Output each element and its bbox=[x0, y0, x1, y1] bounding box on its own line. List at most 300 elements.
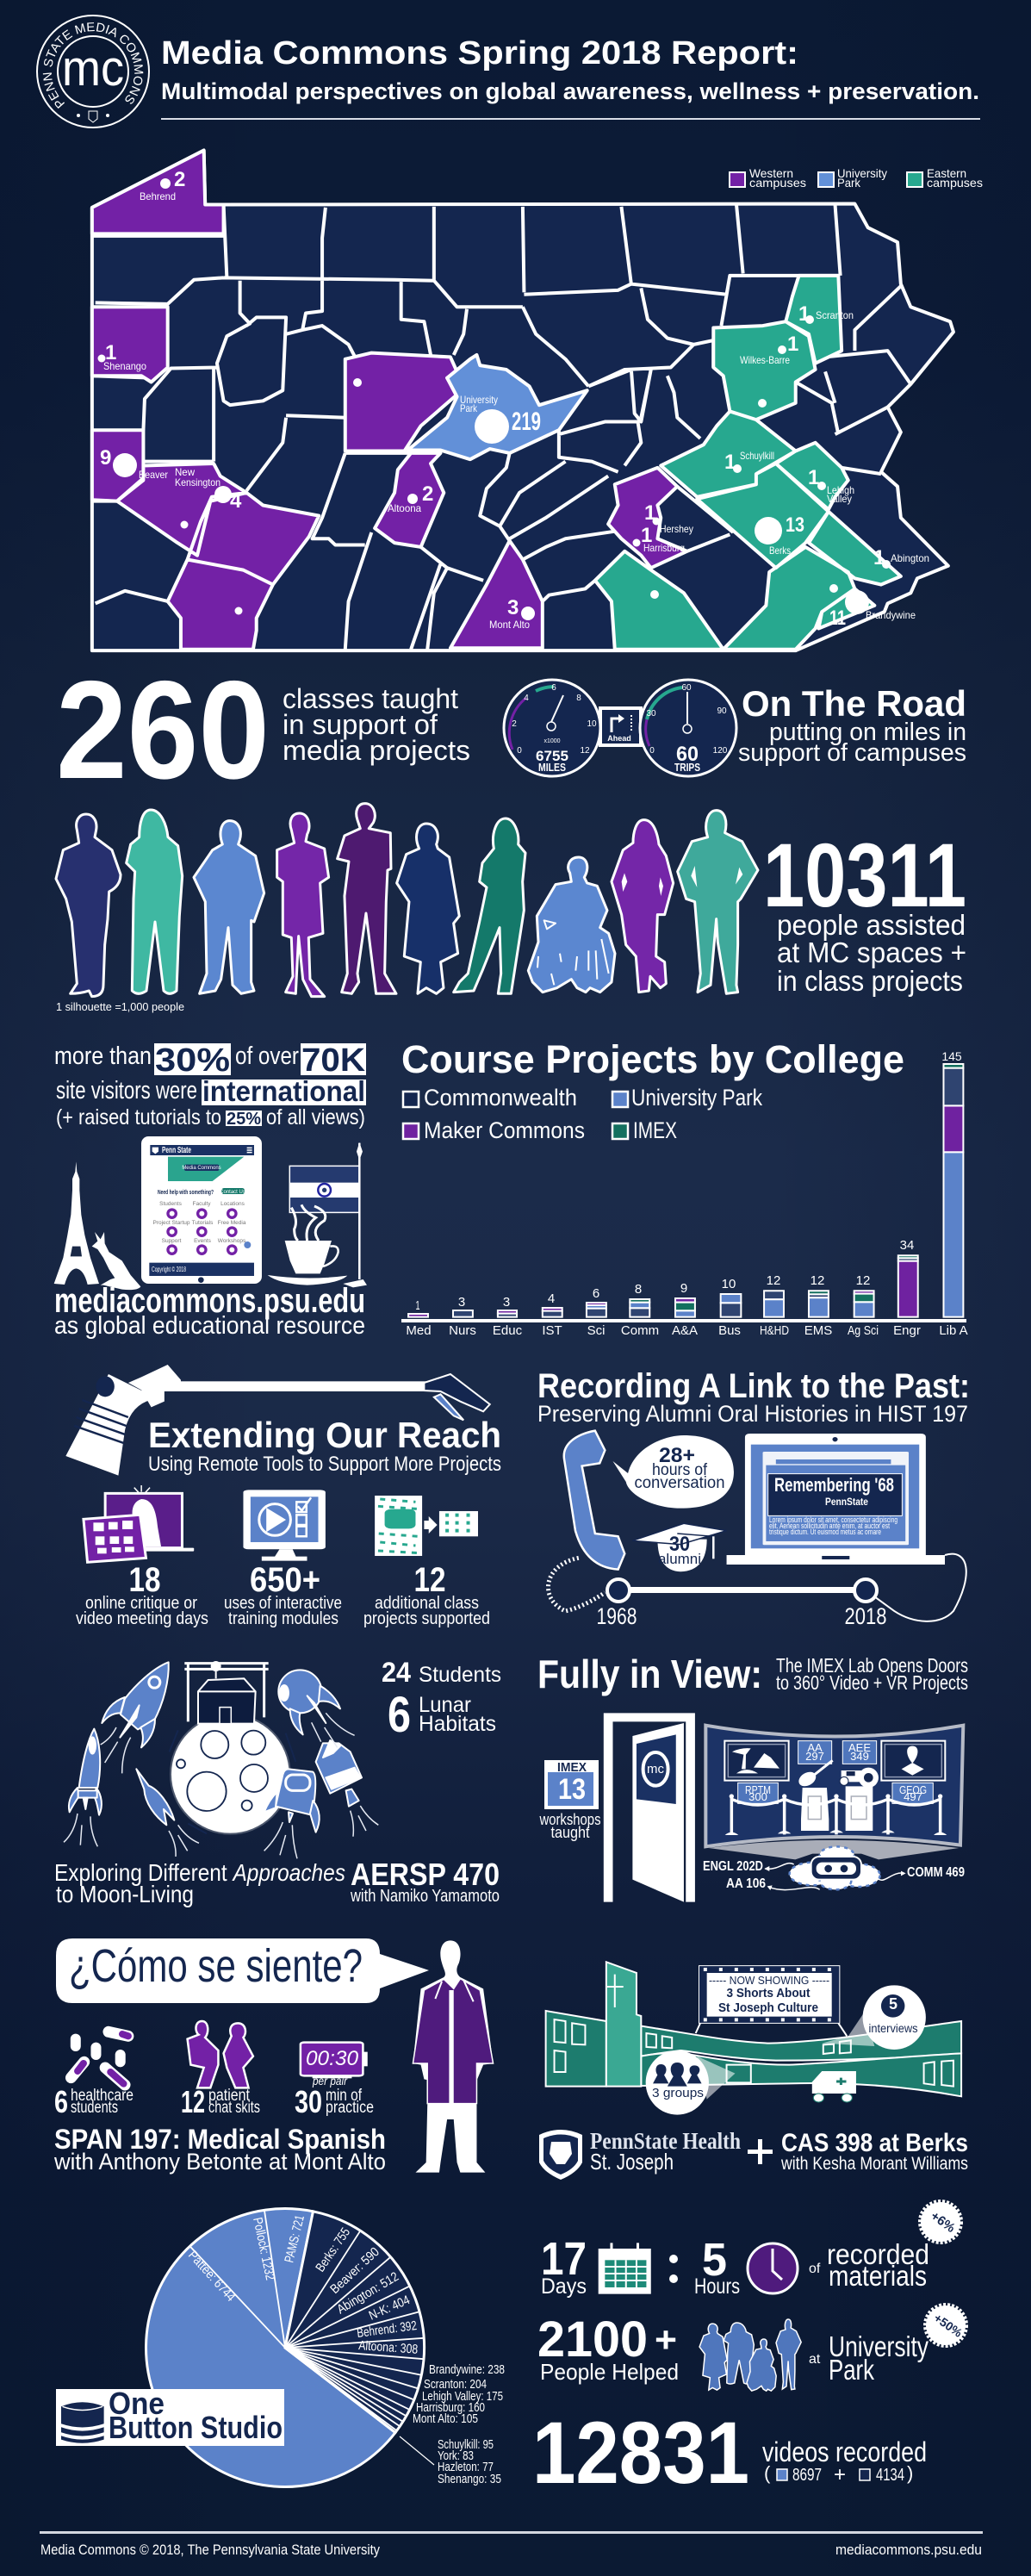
campus counts: 1 bbox=[873, 546, 885, 569]
doctor silhouette bbox=[413, 1940, 494, 2173]
bar categories: A&A bbox=[672, 1323, 698, 1338]
heading: Fully in View bbox=[537, 1652, 968, 1696]
stats: medical Spanish: 12 bbox=[181, 2084, 205, 2119]
logo: Penn State Media Commons seal: PENN STATE MEDIA COMMONS bbox=[43, 22, 143, 109]
campus counts: 13 bbox=[786, 513, 804, 537]
illustration: lunar habitat and rockets bbox=[64, 1661, 378, 1858]
heading: Extending Our Reach: Extending Our Reach bbox=[148, 1415, 501, 1455]
calendar: IMEX workshops: taught bbox=[551, 1824, 589, 1841]
gauge: trips: 60 bbox=[681, 683, 692, 693]
stat: people helped at University Park: 2100 bbox=[537, 2312, 648, 2368]
callout: interviews: 5 bbox=[889, 1995, 897, 2013]
laptop screen text: Remembering '68 bbox=[774, 1474, 894, 1496]
stat: students and habitats: Lunar bbox=[419, 1693, 471, 1717]
plate labels: GEOG bbox=[899, 1783, 927, 1796]
bar categories: EMS bbox=[804, 1323, 832, 1338]
laptop screen text: PennState bbox=[825, 1496, 868, 1508]
speech bubble bbox=[612, 1435, 734, 1509]
chart heading: Course Projects by College: Course Projects by College bbox=[401, 1037, 904, 1081]
callout bubble bbox=[822, 1985, 926, 2050]
stat: 260 classes: in support of bbox=[283, 709, 438, 740]
plate labels: AA bbox=[807, 1741, 823, 1754]
tablet labels: Support bbox=[162, 1238, 182, 1244]
plate labels: 497 bbox=[904, 1790, 922, 1803]
heading: On The Road: support of campuses bbox=[738, 739, 966, 767]
gauge: miles: 2 bbox=[512, 719, 517, 729]
badge: +50% bbox=[925, 2305, 966, 2346]
bar values: 12 bbox=[811, 1273, 824, 1288]
stat: days and hours of recorded materials: 5 bbox=[702, 2234, 727, 2286]
campus counts: 219 bbox=[512, 408, 541, 436]
icons: global landmarks and tablet bbox=[54, 1136, 367, 1290]
headset course labels: AA 106 bbox=[726, 1876, 766, 1891]
bar values: 3 bbox=[503, 1295, 510, 1310]
map legend bbox=[730, 166, 983, 190]
illustration: St Joseph hospital bbox=[546, 1962, 961, 2115]
slice labels outside pie: Lehigh Valley: 175 bbox=[422, 2389, 503, 2404]
stat: 260 classes: media projects bbox=[283, 735, 470, 766]
stats: remote tools: training modules bbox=[228, 1609, 338, 1628]
icon: telephone bbox=[548, 1431, 624, 1611]
tablet labels: Copyright © 2018 bbox=[152, 1266, 186, 1273]
chart legend: Maker Commons bbox=[424, 1117, 585, 1143]
stat: 260 classes: 260 bbox=[56, 652, 270, 808]
bar values: 1 bbox=[415, 1298, 420, 1313]
marquee text bbox=[709, 1974, 829, 2015]
timeline bbox=[596, 1579, 887, 1629]
stat: students and habitats bbox=[382, 1657, 501, 1743]
heading: On The Road: putting on miles in bbox=[769, 719, 966, 746]
stat: people helped at University Park: University bbox=[829, 2330, 929, 2362]
title bbox=[161, 35, 980, 120]
heading: Extending Our Reach: Using Remote Tools to Support More Projects bbox=[148, 1453, 501, 1476]
shield bbox=[539, 2130, 582, 2180]
screen panel bbox=[705, 1726, 963, 1859]
icon: cylinders bbox=[61, 2402, 104, 2443]
chart legend: University Park bbox=[631, 1085, 762, 1111]
stats: remote tools: video meeting days bbox=[76, 1609, 208, 1628]
stat: 260 classes bbox=[56, 652, 470, 808]
campus names: Behrend bbox=[140, 190, 176, 202]
heading: Fully in View: The IMEX Lab Opens Doors bbox=[776, 1654, 968, 1677]
campus names: Abington bbox=[891, 552, 929, 564]
chart baseline bbox=[401, 1319, 966, 1322]
badge: +50%: +50% bbox=[931, 2311, 966, 2340]
callout: groups: 3 groups bbox=[652, 2086, 704, 2100]
stats: medical Spanish: students bbox=[71, 2099, 118, 2117]
road sign bbox=[600, 708, 641, 745]
gauge: trips: 0 bbox=[649, 746, 655, 756]
marquee text: ----- NOW SHOWING ----- bbox=[709, 1974, 829, 1987]
bar values: 12 bbox=[767, 1273, 780, 1288]
bar values: 8 bbox=[635, 1282, 642, 1297]
campus names: Lehigh bbox=[827, 484, 854, 496]
bar categories: Nurs bbox=[449, 1323, 476, 1338]
headset course labels: ENGL 202D bbox=[703, 1859, 763, 1874]
laptop screen text bbox=[769, 1474, 897, 1536]
marquee text: 3 Shorts About bbox=[727, 1986, 810, 2000]
speech bubble: Como se siente: ¿Cómo se siente? bbox=[69, 1940, 363, 1992]
stats: medical Spanish: chat skits bbox=[208, 2099, 260, 2117]
heading: On The Road bbox=[738, 683, 966, 767]
campus counts bbox=[100, 168, 885, 630]
chart legend: IMEX bbox=[633, 1117, 677, 1143]
Penn State Health logo: PennState Health bbox=[590, 2128, 741, 2154]
gauge: trips: 30 bbox=[646, 709, 656, 719]
stats: remote tools: 12 bbox=[413, 1561, 446, 1599]
building bbox=[546, 1962, 961, 2096]
slice labels outside pie bbox=[400, 2362, 505, 2486]
stat: people helped at University Park: People Helped bbox=[540, 2359, 679, 2385]
stat: people helped at University Park: Park bbox=[829, 2354, 874, 2386]
stats: medical Spanish: healthcare bbox=[71, 2087, 134, 2105]
international visitors text: of over bbox=[235, 1042, 299, 1070]
campus counts: 1 bbox=[105, 341, 116, 364]
campus names: Kensington bbox=[175, 476, 220, 488]
stat: people helped at University Park bbox=[537, 2305, 966, 2391]
international visitors text: international bbox=[202, 1075, 365, 1107]
laptop screen text: elit. Aenean sollicitudin ante enim, at auctor est bbox=[769, 1521, 890, 1530]
slice labels outside pie: Scranton: 204 bbox=[424, 2377, 487, 2392]
silhouette key: 1 silhouette =1,000 people bbox=[56, 1000, 184, 1013]
stats: remote tools: uses of interactive bbox=[224, 1594, 342, 1613]
callout bubble bbox=[646, 2050, 735, 2115]
badge: +6% bbox=[920, 2201, 961, 2243]
slice labels on pie: Altoona: 308 bbox=[358, 2338, 419, 2357]
label: One Button Studio bbox=[56, 2386, 284, 2446]
people row: last four bbox=[454, 811, 758, 993]
map legend: campuses bbox=[749, 176, 806, 190]
gauge: trips: 60 bbox=[676, 743, 699, 766]
stat: students and habitats: 6 bbox=[388, 1687, 411, 1743]
stat: 12831 videos recorded: 12831 bbox=[532, 2404, 749, 2502]
campus names: Wilkes-Barre bbox=[740, 354, 790, 366]
stat: days and hours of recorded materials: of bbox=[809, 2262, 821, 2276]
stacked bar chart bbox=[401, 1049, 968, 1338]
heading: SPAN 197: SPAN 197: Medical Spanish bbox=[54, 2124, 386, 2155]
icon: calendar bbox=[599, 2243, 651, 2294]
campus names: Scranton bbox=[816, 309, 854, 321]
campus counts: 1 bbox=[798, 302, 810, 326]
rocket windows bbox=[89, 1676, 289, 1755]
slice labels outside pie: Schuylkill: 95 bbox=[438, 2437, 494, 2452]
tablet labels: Penn State bbox=[162, 1146, 191, 1155]
tablet labels: Project Startup bbox=[153, 1220, 190, 1226]
map legend: Park bbox=[837, 176, 861, 190]
slice labels on pie: PAMS: 721 bbox=[282, 2214, 307, 2264]
bar categories: H&HD bbox=[760, 1323, 789, 1338]
stat: students and habitats: 24 bbox=[382, 1657, 411, 1688]
chart legend: Commonwealth bbox=[424, 1085, 577, 1111]
map legend: Western bbox=[749, 166, 793, 180]
callout: interviews bbox=[822, 1985, 926, 2050]
heading: CAS 398 at Berks: CAS 398 at Berks bbox=[781, 2129, 968, 2157]
campus counts: 1 bbox=[808, 466, 819, 489]
tablet labels: Need help with something? bbox=[158, 1190, 214, 1196]
campus names: Brandywine bbox=[866, 609, 916, 621]
icon: clock bbox=[748, 2243, 798, 2293]
plus sign bbox=[748, 2139, 773, 2164]
pie chart: One Button Studio bbox=[146, 2208, 505, 2486]
slice labels outside pie: Harrisburg: 160 bbox=[416, 2400, 485, 2415]
stats: remote tools bbox=[76, 1561, 490, 1628]
gauge: miles bbox=[504, 680, 600, 776]
exhaust trails bbox=[64, 1713, 378, 1858]
stats: medical Spanish: practice bbox=[326, 2099, 374, 2117]
slice labels on pie: Beaver: 590 bbox=[327, 2244, 382, 2297]
caption: AERSP 470: with Namiko Yamamoto bbox=[350, 1887, 500, 1906]
stat: 12831 videos recorded: videos recorded bbox=[762, 2436, 927, 2467]
timeline: 2018 bbox=[844, 1603, 887, 1629]
heading: Extending Our Reach bbox=[148, 1415, 501, 1476]
icons: Eiffel tower, kangaroo, flag, cup bbox=[54, 1142, 367, 1290]
footer: Media Commons © 2018, The Pennsylvania State University bbox=[40, 2542, 380, 2558]
gauge: miles: MILES bbox=[538, 761, 566, 774]
Penn State Health logo bbox=[539, 2128, 741, 2180]
calendar: IMEX workshops: workshops bbox=[539, 1811, 601, 1828]
illustration: 360 gallery screen bbox=[703, 1726, 965, 1891]
campus counts: 11 bbox=[829, 607, 846, 630]
stats: medical Spanish: per pair bbox=[312, 2074, 348, 2088]
campus names: New bbox=[175, 466, 195, 478]
stats: medical Spanish bbox=[54, 2074, 374, 2119]
campus counts: 4 bbox=[230, 489, 242, 513]
gauges: miles and trips bbox=[504, 680, 736, 776]
heading: Recording A Link to the Past bbox=[537, 1367, 970, 1427]
stat: days and hours of recorded materials: materials bbox=[829, 2260, 927, 2292]
illustration: grabber reaching paper bbox=[65, 1365, 490, 1476]
plate labels: RPTM bbox=[745, 1783, 771, 1796]
gauge: trips: TRIPS bbox=[674, 761, 700, 774]
international visitors text bbox=[54, 1042, 366, 1129]
international visitors text: 25% bbox=[227, 1110, 261, 1129]
stat: students and habitats: Students bbox=[419, 1663, 501, 1687]
bar values: 12 bbox=[856, 1273, 870, 1288]
campus names: Berks bbox=[769, 544, 791, 557]
heading: Recording A Link to the Past: Preserving Alumni Oral Histories in HIST 197 bbox=[537, 1401, 968, 1427]
international visitors text: (+ raised tutorials to bbox=[56, 1105, 221, 1129]
stat: 12831 videos recorded bbox=[532, 2404, 927, 2502]
illustration: phone, laptop and timeline bbox=[548, 1431, 966, 1629]
campus names: Mont Alto bbox=[489, 619, 530, 631]
stat: 12831 videos recorded: 8697 bbox=[792, 2466, 822, 2485]
tablet labels: Free Media bbox=[218, 1220, 246, 1226]
stat: days and hours of recorded materials bbox=[541, 2201, 961, 2299]
heading: On The Road: On The Road bbox=[742, 683, 966, 724]
bubble text: conversation bbox=[634, 1474, 725, 1492]
calendar: IMEX workshops bbox=[539, 1760, 601, 1841]
slice labels on pie bbox=[185, 2214, 419, 2357]
campus names: Hershey bbox=[660, 523, 693, 535]
slice labels outside pie: Hazleton: 77 bbox=[438, 2460, 494, 2474]
tablet labels: Workshops bbox=[218, 1238, 246, 1244]
bars bbox=[408, 1064, 963, 1317]
tablet labels: Students bbox=[159, 1201, 183, 1207]
slice labels on pie: Pollock: 1232 bbox=[250, 2216, 277, 2281]
campus counts: 1 bbox=[641, 524, 652, 547]
stats: remote tools: online critique or bbox=[85, 1594, 197, 1613]
international visitors text: of all views) bbox=[266, 1105, 365, 1129]
slice labels on pie: N-K: 404 bbox=[367, 2293, 412, 2324]
stat: people helped at University Park: at bbox=[809, 2352, 821, 2367]
campus counts: 9 bbox=[100, 446, 111, 470]
heading: SPAN 197 bbox=[53, 2124, 386, 2175]
gauge: miles: 8 bbox=[576, 694, 581, 703]
habitat frame bbox=[184, 1661, 269, 1724]
label: One Button Studio: Button Studio bbox=[109, 2410, 283, 2445]
icon: small people bbox=[699, 2319, 801, 2391]
gauge: miles: 6 bbox=[551, 683, 556, 693]
bar values: 3 bbox=[458, 1295, 465, 1310]
international visitors text: more than bbox=[54, 1042, 152, 1070]
campus counts: 3 bbox=[507, 596, 519, 619]
stats: medical Spanish: patient bbox=[208, 2087, 251, 2105]
international visitors text: 70K bbox=[301, 1042, 366, 1079]
bar values: 4 bbox=[548, 1291, 555, 1306]
title: Media Commons Spring 2018 Report: bbox=[161, 35, 798, 72]
timer text: 00:30 bbox=[306, 2047, 359, 2070]
campus names: Schuylkill bbox=[740, 450, 774, 462]
slice labels outside pie: Shenango: 35 bbox=[438, 2472, 501, 2486]
slice labels on pie: Berks: 755 bbox=[313, 2225, 353, 2274]
tablet labels: Faculty bbox=[193, 1201, 211, 1207]
gauge: trips: 90 bbox=[717, 706, 727, 716]
campus counts: 1 bbox=[787, 333, 798, 356]
international visitors text: 30% bbox=[155, 1042, 230, 1079]
stat: 10311 people: at MC spaces + bbox=[777, 936, 966, 968]
calendar: IMEX workshops: IMEX bbox=[557, 1760, 587, 1775]
heading: mediacommons.psu.edu: as global educational resource bbox=[54, 1312, 365, 1340]
marquee sign bbox=[696, 1966, 847, 2036]
bar values: 34 bbox=[900, 1238, 914, 1253]
campus names: Park bbox=[460, 402, 478, 414]
stat: days and hours of recorded materials: recorded bbox=[827, 2238, 929, 2270]
marquee text: St Joseph Culture bbox=[718, 2000, 818, 2015]
campus counts: 1 bbox=[724, 451, 736, 474]
badge: +6%: +6% bbox=[928, 2209, 958, 2236]
stat: days and hours of recorded materials: 17 bbox=[541, 2233, 587, 2285]
stats: remote tools: projects supported bbox=[363, 1609, 490, 1628]
icon: monitor with interactive module bbox=[243, 1490, 326, 1561]
heading: SPAN 197: with Anthony Betonte at Mont Alto bbox=[53, 2149, 386, 2175]
gauge: miles: 0 bbox=[517, 746, 522, 756]
heading: CAS 398 at Berks bbox=[780, 2129, 968, 2174]
slice labels on pie: Behrend: 392 bbox=[356, 2318, 418, 2341]
stats: remote tools: 650+ bbox=[250, 1561, 320, 1599]
caption: AERSP 470 bbox=[54, 1857, 500, 1907]
campus names: Shenango bbox=[103, 360, 146, 372]
stat: 10311 people: people assisted bbox=[777, 909, 966, 941]
icons: medical Spanish stats bbox=[71, 2021, 368, 2088]
alumni count bbox=[658, 1533, 701, 1567]
Penn State Health logo: St. Joseph bbox=[590, 2149, 674, 2175]
stats: remote tools: 18 bbox=[129, 1561, 160, 1599]
road sign: Ahead bbox=[607, 734, 631, 743]
map legend: University bbox=[837, 166, 887, 180]
tablet labels: Contact Us bbox=[220, 1190, 245, 1195]
gauge: miles: 12 bbox=[580, 746, 590, 756]
heading: mediacommons.psu.edu: mediacommons.psu.edu bbox=[54, 1282, 365, 1320]
bar categories: Sci bbox=[587, 1323, 605, 1338]
bubble text bbox=[634, 1444, 725, 1492]
plate labels bbox=[745, 1741, 927, 1803]
stats: medical Spanish: min of bbox=[326, 2087, 363, 2105]
campus names: Altoona bbox=[388, 502, 421, 514]
gauge: miles: 4 bbox=[524, 694, 529, 703]
stat: people helped at University Park: + bbox=[655, 2319, 677, 2360]
icon: patient chat bbox=[188, 2021, 253, 2088]
stat: 12831 videos recorded: + bbox=[834, 2463, 846, 2486]
callout: groups bbox=[646, 2050, 735, 2115]
campus counts: 2 bbox=[422, 482, 433, 506]
bar categories: Bus bbox=[718, 1323, 741, 1338]
heading: Fully in View: to 360° Video + VR Projects bbox=[776, 1671, 968, 1694]
stat: days and hours of recorded materials: Hours bbox=[694, 2274, 740, 2299]
gauge: trips bbox=[640, 680, 736, 776]
stat: students and habitats: Habitats bbox=[419, 1712, 496, 1736]
bar categories: IST bbox=[542, 1323, 562, 1338]
bar categories: Comm bbox=[621, 1323, 659, 1338]
footer bbox=[40, 2531, 983, 2558]
timeline: 1968 bbox=[596, 1603, 637, 1629]
headset course labels: COMM 469 bbox=[907, 1865, 965, 1880]
campus names: Valley bbox=[827, 493, 852, 505]
international visitors text: site visitors were bbox=[56, 1077, 197, 1104]
bubble text: hours of bbox=[652, 1461, 708, 1479]
stats: medical Spanish: 30 bbox=[295, 2084, 322, 2119]
gauge: miles: x1000 bbox=[543, 738, 561, 744]
rockets bbox=[69, 1662, 362, 1832]
stat: 10311 people: in class projects bbox=[777, 965, 963, 997]
heading: Fully in View: Fully in View: bbox=[537, 1652, 762, 1696]
moon bbox=[170, 1715, 295, 1833]
map shapes bbox=[92, 150, 953, 650]
bar categories: Med bbox=[406, 1323, 432, 1338]
bubble text: 28+ bbox=[659, 1444, 695, 1467]
gauge: trips: 120 bbox=[713, 746, 728, 756]
silhouettes of people bbox=[56, 804, 758, 1013]
slice labels outside pie: Brandywine: 238 bbox=[429, 2362, 505, 2377]
plate labels: AEE bbox=[848, 1741, 871, 1754]
door logo text: mc bbox=[647, 1762, 664, 1776]
chart legend bbox=[403, 1085, 762, 1143]
plate labels: 297 bbox=[805, 1750, 824, 1763]
stat: days and hours of recorded materials: Days bbox=[541, 2274, 587, 2299]
VR headset bbox=[764, 1846, 906, 1890]
campus names bbox=[103, 190, 929, 631]
map legend: Eastern bbox=[927, 166, 966, 180]
icon: laptop video meeting bbox=[84, 1485, 194, 1562]
icon: pills bbox=[71, 2032, 128, 2085]
slice labels on pie: Abington: 512 bbox=[334, 2269, 401, 2317]
tablet labels: Locations bbox=[220, 1201, 245, 1207]
heading: mediacommons.psu.edu bbox=[54, 1282, 365, 1340]
bar values: 9 bbox=[680, 1281, 687, 1296]
map legend: campuses bbox=[927, 176, 983, 190]
title: Multimodal perspectives on global awareness, wellness + preservation. bbox=[161, 78, 979, 104]
icon: laptop bbox=[727, 1434, 966, 1621]
caption: AERSP 470: AERSP 470 bbox=[351, 1857, 500, 1892]
illustration: open door bbox=[604, 1713, 695, 1902]
headset course labels bbox=[703, 1859, 965, 1891]
stat: 12831 videos recorded: ) bbox=[907, 2462, 913, 2484]
bar values: 145 bbox=[941, 1049, 962, 1063]
tablet showing website bbox=[141, 1136, 262, 1284]
footer: mediacommons.psu.edu bbox=[835, 2542, 982, 2558]
map of Pennsylvania campuses bbox=[92, 150, 983, 650]
callout: interviews: interviews bbox=[868, 2021, 918, 2035]
stat: 10311 people: 10311 bbox=[763, 825, 966, 926]
